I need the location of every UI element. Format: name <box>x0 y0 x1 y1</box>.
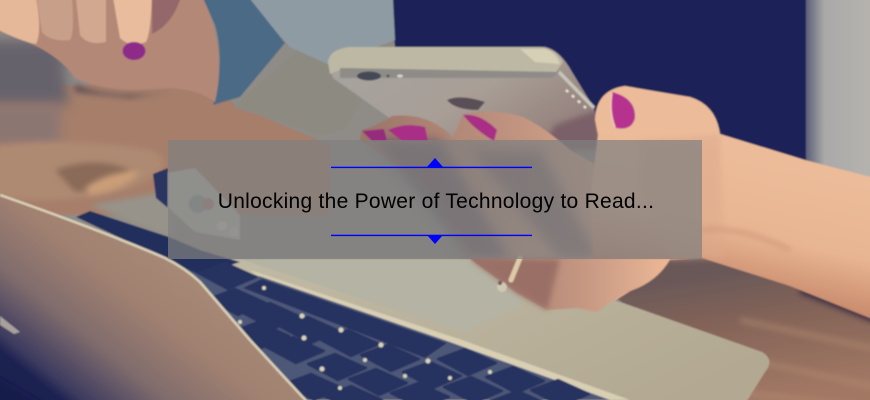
finger nails <box>463 115 497 141</box>
cream strip along keyboard <box>250 270 630 400</box>
banner overlay panel <box>168 140 702 259</box>
dark navy background, top right <box>388 0 830 170</box>
back row keys <box>76 211 240 275</box>
fingers under phone <box>360 112 670 312</box>
decorative dividers with triangles <box>331 158 532 244</box>
laptop base <box>150 245 769 400</box>
small round object on desk <box>153 168 240 240</box>
laptop screen lid <box>0 186 310 400</box>
left hand nail <box>122 42 146 60</box>
thumb nail <box>611 92 635 129</box>
trackpad <box>240 259 523 332</box>
keys <box>198 263 256 289</box>
long bar <box>243 279 447 358</box>
sleeve and left hand <box>0 0 395 105</box>
phone <box>328 47 600 150</box>
key gap highlights <box>238 286 492 390</box>
keyboard <box>76 211 610 400</box>
light wall, far right <box>806 0 870 190</box>
right hand and forearm <box>590 86 870 326</box>
wood table, right <box>560 255 870 400</box>
hand over trackpad <box>470 259 670 312</box>
ring <box>497 258 520 292</box>
apple logo <box>447 97 485 110</box>
title: Unlocking the Power of Technology to Read... <box>218 190 654 213</box>
